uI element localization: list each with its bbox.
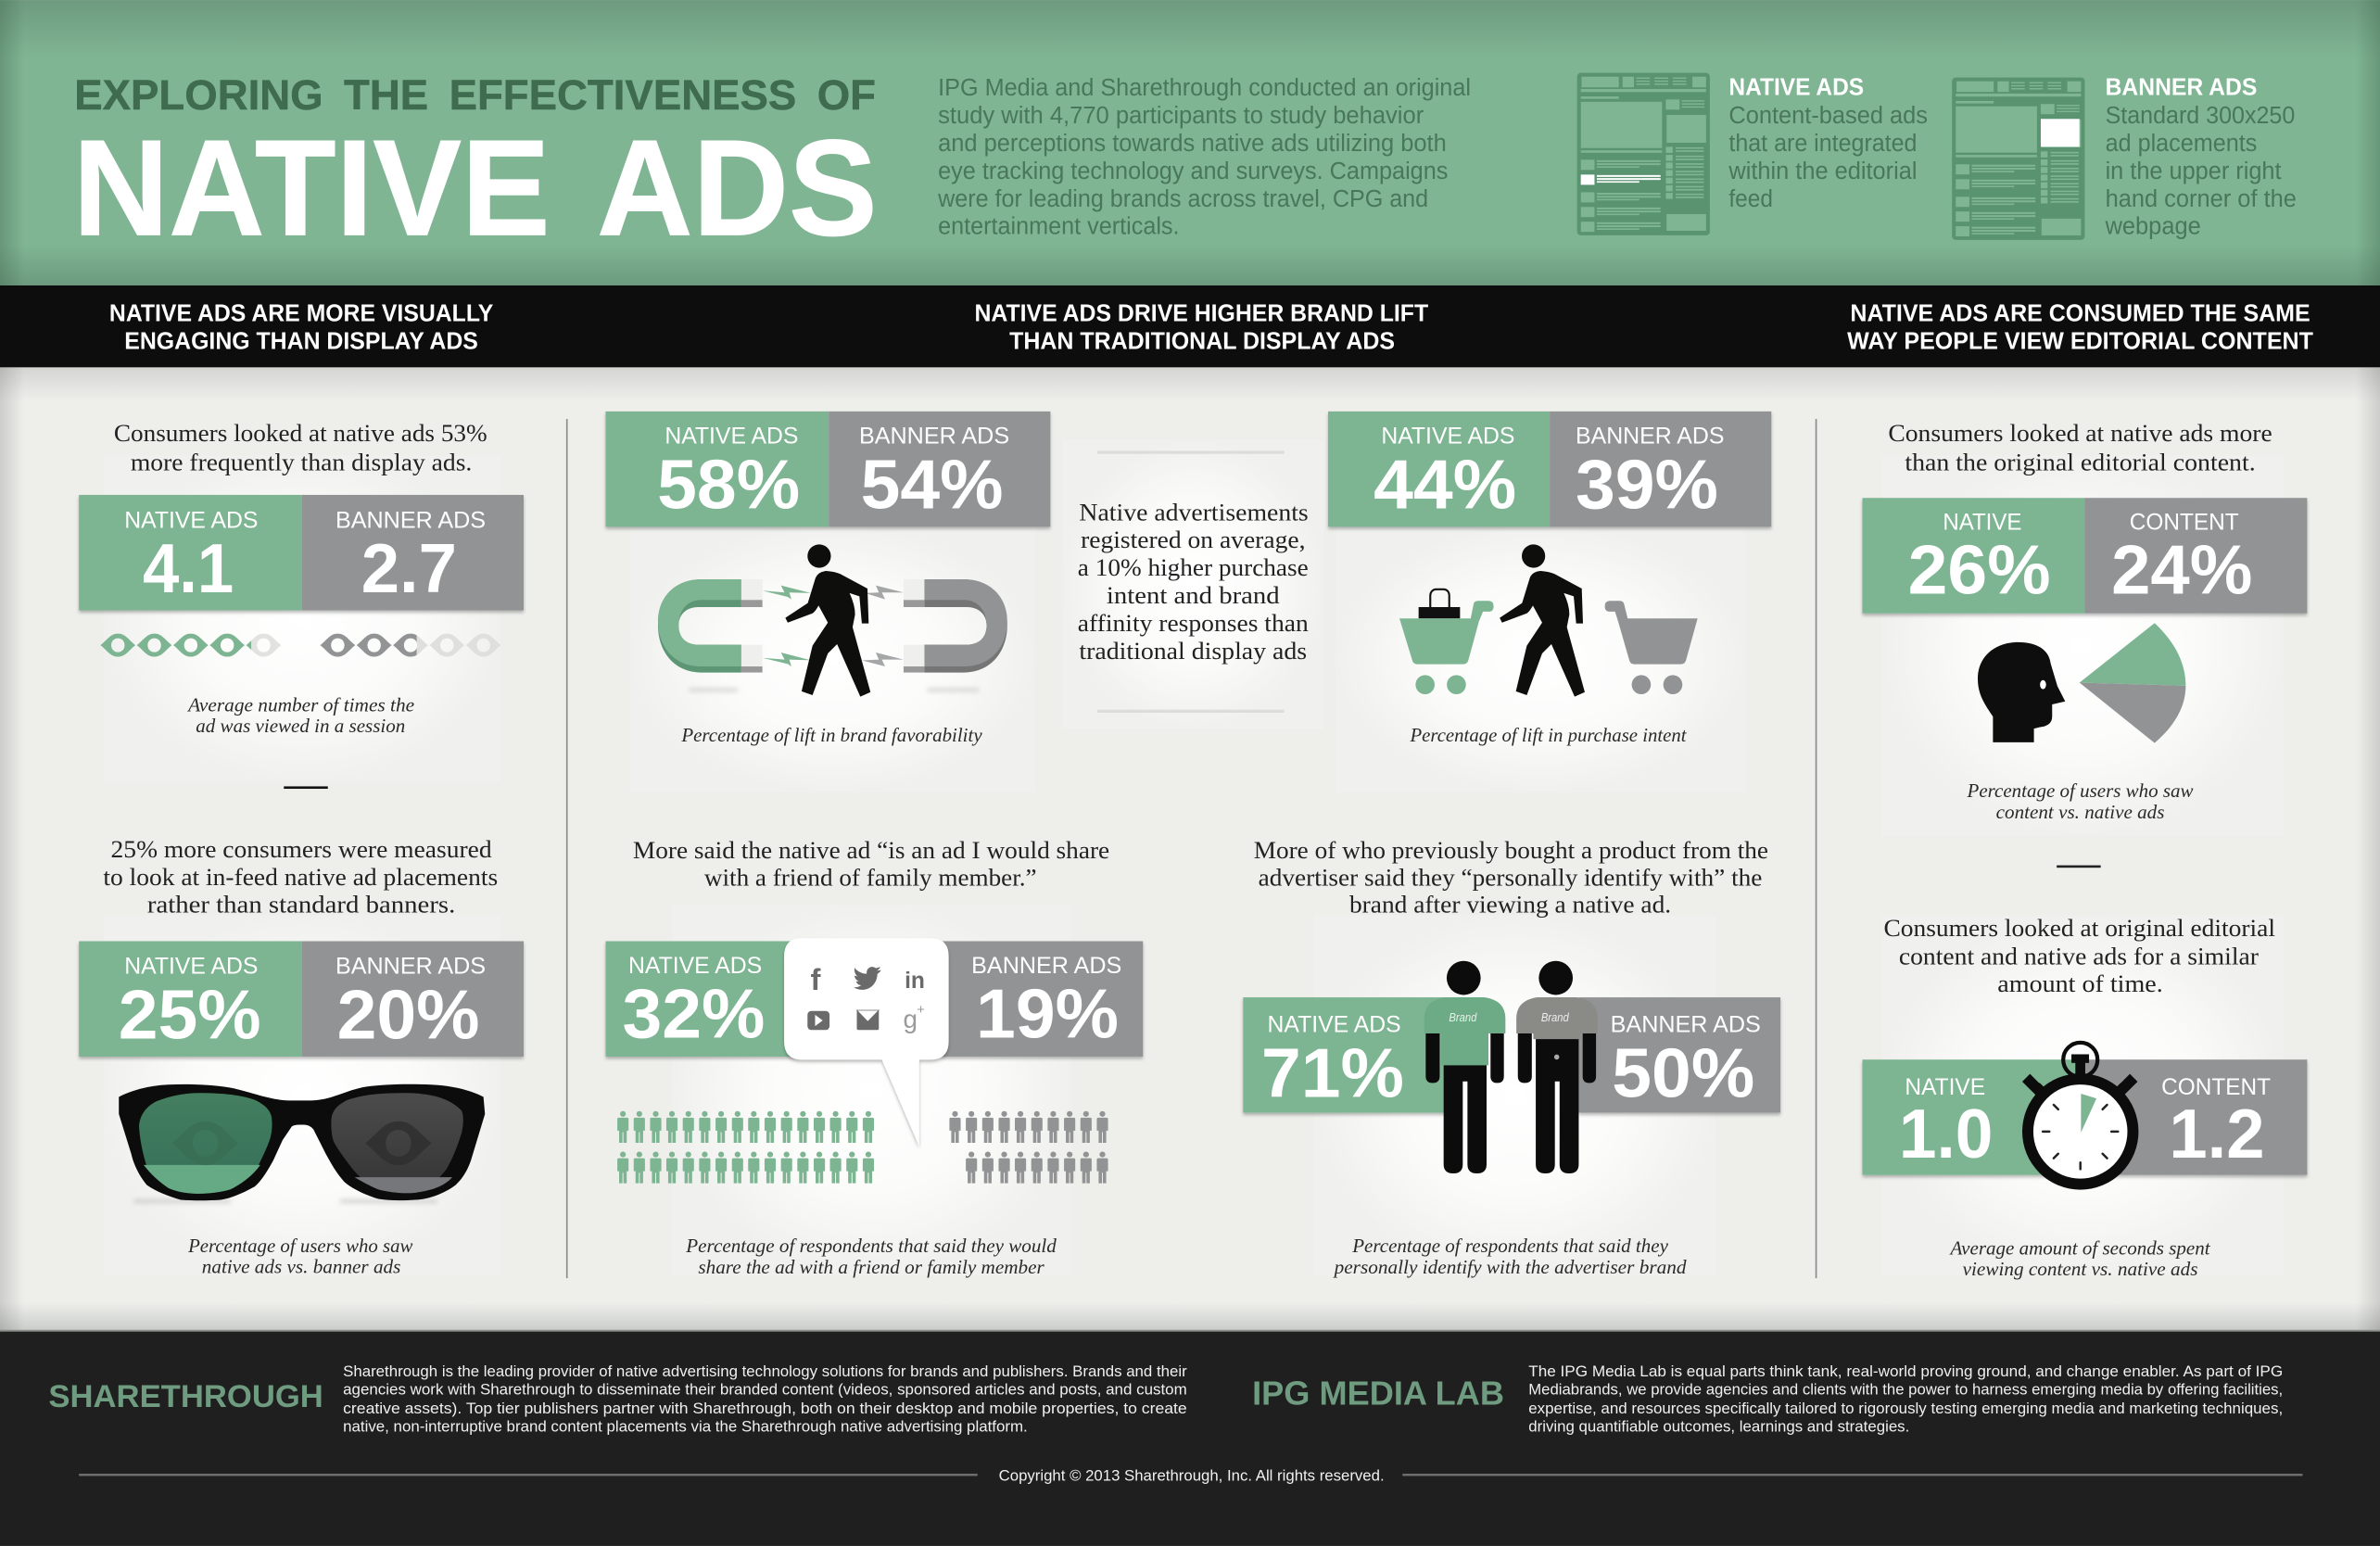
banner ads definition: webpage [2105,212,2201,240]
icon: walking person [785,544,870,697]
intro paragraph: IPG Media and Sharethrough conducted an original [938,73,1471,101]
stat box: 71% vs 50%: BANNER ADS [1611,1012,1761,1038]
icon grid: banner sharers [949,1111,1108,1184]
heading text [1888,420,2272,475]
stat box: 44% vs 39%: 39% [1576,446,1718,524]
caption [685,1236,1057,1278]
pie wedge: native vs content [2080,623,2185,743]
intro paragraph: were for leading brands across travel, CPG and [937,184,1428,212]
heading text: amount of time. [1997,970,2163,997]
panel: purchase intent note: intent and brand [1107,582,1280,609]
IPG Media Lab description: The IPG Media Lab is equal parts think tank, real-world proving ground, and change enabler. As part of IPG [1528,1362,2283,1380]
stat box: 32% vs 19%: BANNER ADS [971,953,1121,979]
caption [186,696,414,737]
panel: body background [0,367,2380,1331]
IPG Media Lab description: Mediabrands, we provide agencies and clients with the power to harness emerging media by offering facilities, [1528,1381,2283,1399]
banner ads definition: hand corner of the [2106,184,2297,212]
intro paragraph: and perceptions towards native ads utilizing both [938,129,1447,157]
panel: purchase intent note: registered on average, [1081,526,1305,553]
panel: in-feed glasses [79,836,524,1278]
stat box: 58% vs 54%: NATIVE ADS [665,423,798,449]
icon row: native ad eyes [100,634,281,657]
caption: Percentage of users who saw [187,1236,413,1257]
heading text: rather than standard banners. [147,892,455,919]
heading text: brand after viewing a native ad. [1349,892,1671,919]
caption: Average number of times the [186,696,414,716]
panel: section headings band: ENGAGING THAN DISPLAY ADS [124,327,478,355]
panel: native vs content attention [1863,420,2307,868]
heading text [114,420,487,475]
icon: walking person [1500,544,1585,697]
stat box: 25% vs 20%: BANNER ADS [335,953,486,979]
social icons: + [917,1003,925,1018]
stat box: 26% vs 24%: 26% [1908,530,2051,608]
IPG Media Lab description: expertise, and resources specifically tailored to rigorously testing emerging media and marketing techniques, [1528,1400,2283,1417]
title: NATIVE ADS [73,112,878,264]
panel: purchase intent note: Native advertisements [1079,499,1309,526]
stat box: 44% vs 39%: BANNER ADS [1576,423,1724,449]
heading text: advertiser said they “personally identify with” the [1259,864,1762,891]
stat box: 71% vs 50%: 50% [1612,1033,1754,1111]
heading text: More said the native ad “is an ad I would share [633,837,1109,864]
panel: brand identification [1243,837,1780,1278]
heading text: Consumers looked at original editorial [1883,915,2275,942]
caption [1967,781,2194,823]
stat box: 26% vs 24%: 24% [2111,530,2252,608]
caption: content vs. native ads [1996,803,2164,823]
panel: footer [0,1330,2380,1546]
stat box: 4.1 vs 2.7: 4.1 [143,529,234,607]
banner ads definition: BANNER ADS [2106,72,2257,100]
banner ads definition: Standard 300x250 [2106,101,2295,129]
icon: person in gray brand shirt: Brand [1541,1010,1569,1024]
heading text: content and native ads for a similar [1899,943,2259,969]
Sharethrough description: agencies work with Sharethrough to disseminate their branded content (videos, sponsored articles and posts, and custom [343,1381,1187,1399]
heading text [1883,915,2275,997]
caption: Percentage of respondents that said they [1351,1236,1669,1257]
social icons [807,962,925,1033]
intro paragraph: eye tracking technology and surveys. Campaigns [938,157,1448,184]
panel: section headings band: WAY PEOPLE VIEW EDITORIAL CONTENT [1847,327,2313,355]
stat box: 71% vs 50% [1243,997,1780,1113]
icon: green shopping cart with bag [1399,589,1494,694]
heading text: Consumers looked at native ads 53% [114,420,487,447]
intro paragraph [937,73,1471,240]
icon: native ads page wireframe [1577,73,1710,235]
caption [187,1236,413,1278]
Sharethrough description: native, non-interruptive brand content placements via the Sharethrough native advertising platform. [343,1418,1028,1436]
heading text: with a friend of family member.” [704,864,1037,891]
heading text: More of who previously bought a product from the [1254,837,1768,864]
icon: sunglasses with eye tracking [119,1084,485,1202]
native ads definition [1728,72,1928,212]
Sharethrough description: creative assets). Top tier publishers partner with Sharethrough, both on their desktop and mobile properties, to create [343,1400,1187,1417]
caption: Percentage of respondents that said they would [685,1236,1057,1257]
icon: stopwatch [2022,1043,2138,1190]
banner ads definition: ad placements [2106,129,2257,157]
copyright: Copyright © 2013 Sharethrough, Inc. All rights reserved. [999,1467,1385,1485]
panel: header [0,0,2380,285]
stat box: 58% vs 54%: 58% [657,446,800,524]
logo: Sharethrough: SHARETHROUGH [48,1379,323,1414]
stat box: 58% vs 54%: 54% [861,446,1004,524]
stat box: 58% vs 54%: BANNER ADS [859,423,1009,449]
title: EXPLORING THE EFFECTIVENESS OF [74,70,876,119]
social icons: in [905,969,925,994]
icon: head in profile [1978,642,2065,742]
panel: purchase intent [1328,412,1771,746]
panel: section headings band: NATIVE ADS ARE MORE VISUALLY [109,299,494,327]
panel: purchase intent note: affinity responses than [1078,610,1309,637]
heading text: than the original editorial content. [1905,449,2256,475]
caption: Average amount of seconds spent [1948,1239,2211,1260]
native ads definition: Content-based ads [1728,101,1928,129]
stat box: 44% vs 39%: NATIVE ADS [1381,423,1514,449]
banner ads definition: in the upper right [2106,157,2282,184]
stat box: 58% vs 54% [605,412,1050,526]
stat box: 71% vs 50%: 71% [1261,1033,1404,1111]
panel: views per session [79,420,524,789]
Sharethrough description [343,1362,1187,1436]
panel: sharing [605,837,1143,1278]
stat box: 1.0 vs 1.2: CONTENT [2161,1074,2271,1100]
caption: share the ad with a friend or family member [698,1258,1045,1278]
stat box: 44% vs 39% [1328,412,1771,526]
stat box: 26% vs 24%: NATIVE [1943,510,2021,536]
stat box: 44% vs 39%: 44% [1374,446,1516,524]
stat box: 71% vs 50%: NATIVE ADS [1268,1012,1401,1038]
stat box: 4.1 vs 2.7: NATIVE ADS [124,508,258,534]
stat box: 25% vs 20%: 25% [119,975,261,1053]
heading text: 25% more consumers were measured [111,836,492,863]
stat box: 1.0 vs 1.2 [1863,1059,2307,1175]
stat box: 1.0 vs 1.2: 1.2 [2169,1095,2265,1172]
social icons: g [903,1005,918,1033]
caption: viewing content vs. native ads [1963,1260,2197,1280]
stat box: 4.1 vs 2.7 [79,495,524,610]
icon: person in green brand shirt [1424,961,1505,1173]
native ads definition: that are integrated [1728,129,1917,157]
panel: section headings band: THAN TRADITIONAL DISPLAY ADS [1009,327,1395,355]
panel: viewing time [1863,915,2307,1280]
Sharethrough description: Sharethrough is the leading provider of native advertising technology solutions for brands and publishers. Brands and their [343,1362,1187,1380]
stat box: 25% vs 20%: NATIVE ADS [124,953,258,979]
caption: Percentage of lift in purchase intent [1409,726,1688,746]
caption: ad was viewed in a session [196,716,405,737]
banner ads definition [2105,72,2297,240]
stat box: 1.0 vs 1.2: 1.0 [1899,1095,1993,1172]
caption [1948,1239,2211,1280]
panel: section headings band [0,285,2380,367]
native ads definition: feed [1728,184,1773,212]
caption: Percentage of users who saw [1967,781,2194,802]
native ads definition: within the editorial [1728,157,1917,184]
heading text [633,837,1109,891]
icon: person in green brand shirt: Brand [1449,1010,1477,1024]
stat box: 32% vs 19%: 32% [622,974,765,1052]
stat box: 32% vs 19%: 19% [976,974,1119,1052]
caption: personally identify with the advertiser brand [1333,1258,1687,1278]
heading text: more frequently than display ads. [131,449,472,475]
stat box: 1.0 vs 1.2: NATIVE [1905,1074,1985,1100]
icon: gray shopping cart [1605,601,1698,694]
heading text: Consumers looked at native ads more [1888,420,2272,447]
stat box: 25% vs 20% [79,941,524,1057]
stat box: 4.1 vs 2.7: 2.7 [361,529,457,607]
panel: section headings band: NATIVE ADS DRIVE HIGHER BRAND LIFT [974,299,1428,327]
stat box: 4.1 vs 2.7: BANNER ADS [335,508,486,534]
stat box: 32% vs 19%: NATIVE ADS [628,953,762,979]
icon: banner ads page wireframe [1952,78,2084,240]
icon: person in gray brand shirt [1516,961,1598,1173]
caption [1333,1236,1687,1278]
panel: brand favorability [605,412,1050,746]
icon row: banner ad eyes [321,634,500,657]
icon: green magnet [658,579,811,691]
IPG Media Lab description: driving quantifiable outcomes, learnings and strategies. [1528,1418,1909,1436]
social icons: f [811,962,821,996]
heading text [1254,837,1768,919]
callout: social share bubble [784,938,949,1147]
icon grid: native sharers [617,1111,874,1184]
panel: purchase intent note [1078,450,1309,713]
caption: native ads vs. banner ads [202,1258,400,1278]
caption: Percentage of lift in brand favorability [680,726,982,746]
native ads definition: NATIVE ADS [1728,72,1864,100]
panel: section headings band: NATIVE ADS ARE CONSUMED THE SAME [1850,299,2310,327]
stat box: 26% vs 24%: CONTENT [2130,510,2239,536]
panel: purchase intent note: traditional display ads [1079,638,1307,665]
logo: IPG Media Lab: IPG MEDIA LAB [1252,1375,1504,1413]
heading text [103,836,498,919]
intro paragraph: entertainment verticals. [938,212,1180,240]
intro paragraph: study with 4,770 participants to study behavior [938,101,1424,129]
stat box: 32% vs 19% [605,941,1143,1057]
IPG Media Lab description [1528,1362,2283,1436]
panel: purchase intent note: a 10% higher purchase [1078,554,1309,581]
stat box: 25% vs 20%: 20% [337,975,480,1053]
stat box: 26% vs 24% [1863,498,2307,614]
icon: gray magnet [862,579,1007,691]
heading text: to look at in-feed native ad placements [103,864,498,891]
